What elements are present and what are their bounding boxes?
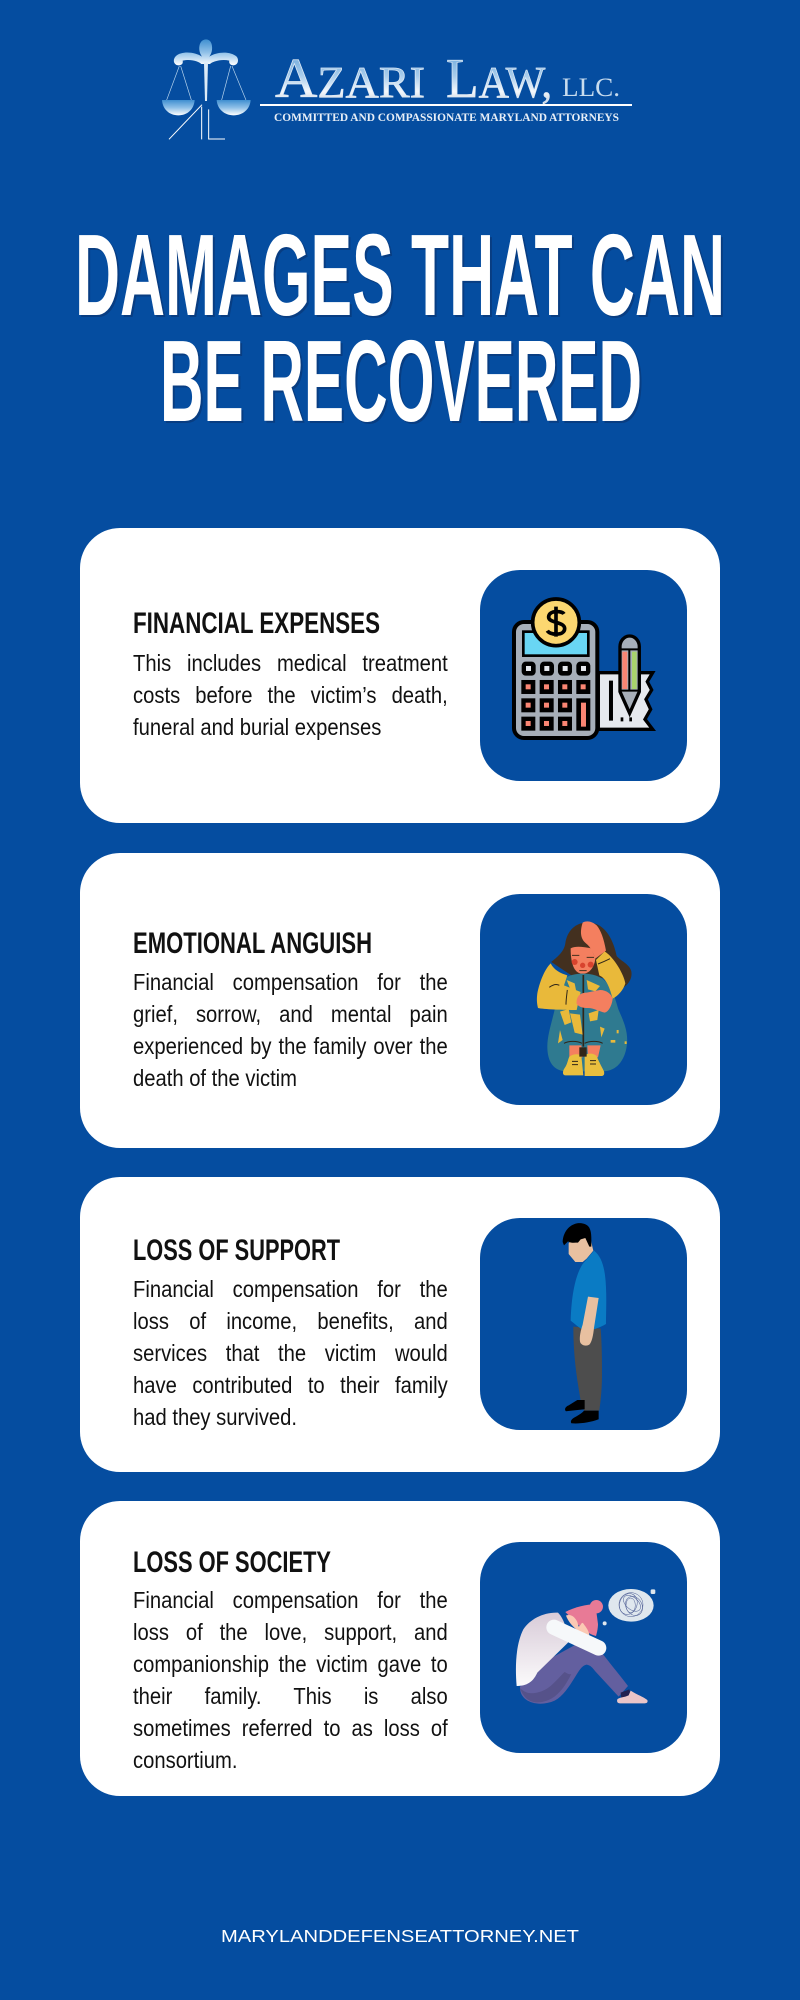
icon tile: sitting person with thought bubble xyxy=(480,1542,687,1753)
logo: Azari Law: COMMITTED AND COMPASSIONATE MARYLAND ATTORNEYS xyxy=(274,112,619,124)
body text: loss of support xyxy=(133,1276,448,1430)
heading: financial expenses: FINANCIAL EXPENSES xyxy=(133,607,380,640)
panel: card financial expenses xyxy=(80,528,720,823)
text: their family. This is also xyxy=(133,1683,448,1709)
panel: card emotional anguish xyxy=(80,853,720,1148)
text: Financial compensation for the xyxy=(133,1276,448,1302)
text: death of the victim xyxy=(133,1065,297,1091)
text: This includes medical treatment xyxy=(133,650,448,676)
title xyxy=(75,210,727,448)
logo: Azari Law: LLC. xyxy=(562,73,620,102)
panel: card loss of society xyxy=(80,1501,720,1796)
text: companionship the victim gave to xyxy=(133,1651,448,1677)
body text: loss of society xyxy=(133,1587,448,1773)
text: have contributed to their family xyxy=(133,1372,448,1398)
body text: emotional anguish xyxy=(133,969,448,1091)
icon: scales of justice xyxy=(162,39,251,139)
text: sometimes referred to as loss of xyxy=(133,1715,448,1741)
icon tile: grieving woman xyxy=(480,894,687,1105)
heading: loss of society: LOSS OF SOCIETY xyxy=(133,1546,331,1579)
icon tile: calculator xyxy=(480,570,687,781)
icon tile: standing man xyxy=(480,1218,687,1430)
text: loss of the love, support, and xyxy=(133,1619,448,1645)
panel: card loss of support xyxy=(80,1177,720,1472)
text: funeral and burial expenses xyxy=(133,714,381,740)
logo: Azari Law: LAW, xyxy=(446,48,552,110)
heading: emotional anguish: EMOTIONAL ANGUISH xyxy=(133,927,372,960)
logo: Azari Law xyxy=(162,39,632,139)
text: services that the victim would xyxy=(133,1340,448,1366)
logo: Azari Law: AZARI xyxy=(275,48,425,110)
heading: loss of support: LOSS OF SUPPORT xyxy=(133,1234,340,1267)
text: had they survived. xyxy=(133,1404,297,1430)
text: Financial compensation for the xyxy=(133,1587,448,1613)
text: experienced by the family over the xyxy=(133,1033,448,1059)
text: costs before the victim’s death, xyxy=(133,682,448,708)
text: consortium. xyxy=(133,1747,237,1773)
text: Financial compensation for the xyxy=(133,969,448,995)
body text: financial expenses xyxy=(133,650,448,740)
text: loss of income, benefits, and xyxy=(133,1308,448,1334)
text: grief, sorrow, and mental pain xyxy=(133,1001,448,1027)
footer website url: MARYLANDDEFENSEATTORNEY.NET xyxy=(221,1926,579,1946)
